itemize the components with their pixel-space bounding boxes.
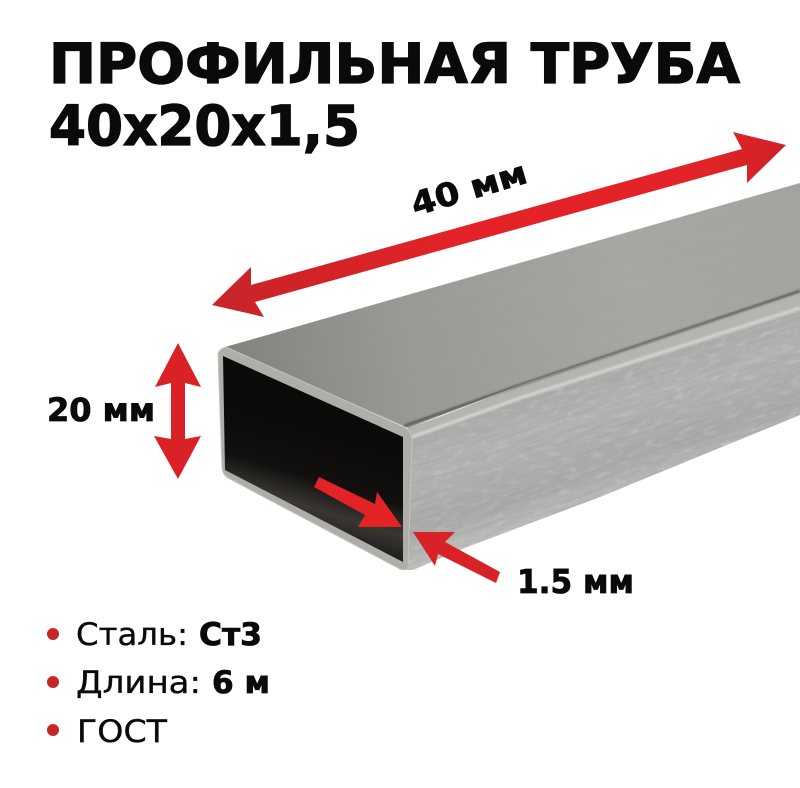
title: 40x20x1,5 <box>49 94 360 158</box>
item: steel grade: Сталь: <box>76 617 188 653</box>
label: 40 mm: 40 мм <box>406 153 531 224</box>
item: standard <box>47 714 168 750</box>
tube opening <box>223 356 403 562</box>
tube end rim <box>218 347 412 570</box>
arrow: wall thickness inner <box>314 477 402 527</box>
label: 1.5 mm: 1.5 мм <box>517 562 634 601</box>
arrow: 40 mm length <box>212 132 786 317</box>
steel profile tube <box>218 183 800 570</box>
item: standard: ГОСТ <box>77 714 168 750</box>
title <box>49 32 740 158</box>
item: length: 6 м <box>212 665 270 701</box>
side face <box>407 312 800 570</box>
item: steel grade <box>47 617 262 653</box>
item: length <box>47 665 270 701</box>
arrow: wall thickness outer <box>413 532 500 583</box>
top face <box>226 183 800 428</box>
item: steel grade: Ст3 <box>199 617 262 653</box>
rounded edge highlight <box>404 291 800 440</box>
arrow: 20 mm height <box>154 343 201 479</box>
label: 20 mm: 20 мм <box>47 391 155 429</box>
item: length: Длина: <box>76 665 201 701</box>
spec list <box>47 617 270 750</box>
title: ПРОФИЛЬНАЯ ТРУБА <box>49 32 740 96</box>
